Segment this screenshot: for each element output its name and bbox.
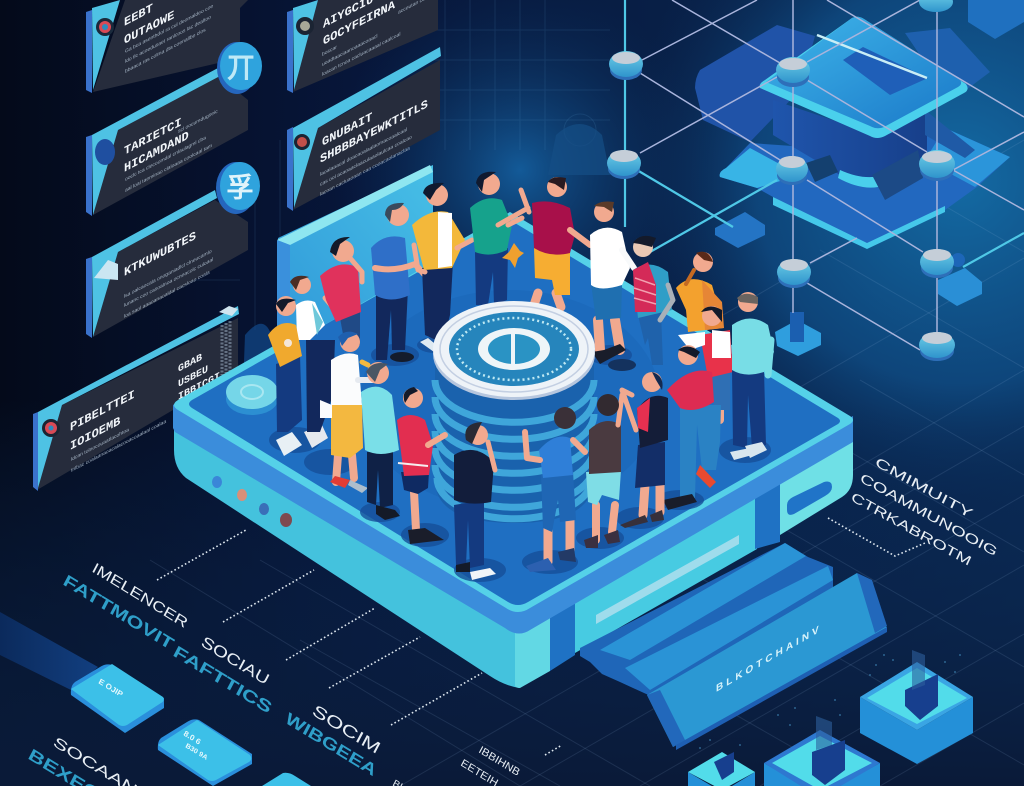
person: white shirt orange trousers (320, 332, 375, 493)
machine middle block (773, 100, 927, 182)
person: red shirt shorts (397, 387, 445, 544)
platform (173, 212, 853, 688)
person: light blue shirt (730, 292, 774, 460)
cube: right (860, 650, 973, 764)
text block: bottom center label (391, 744, 522, 786)
stack body stripes (435, 360, 594, 523)
panel: second right label: SHBBBAYEWKTITLS (320, 96, 428, 167)
text block: social widgets label: WIBGEEA (282, 709, 380, 780)
text block: influencer label: FATTMOVIT (60, 571, 178, 654)
person: red shirt with jeans (663, 345, 721, 510)
platform top deck (174, 212, 853, 612)
person: teal shirt (470, 172, 522, 305)
text block: community label: CMIMUITY (873, 455, 975, 521)
text block: social label bottom-left (25, 734, 140, 786)
panel: top-left label: bbaaca ras colma dta coenallbe clos (125, 27, 206, 75)
panel: bottom-left label: IOIOEMB (70, 413, 121, 454)
ground shadows (269, 337, 771, 582)
panel: top-right label: loacan tcnoa cacluacaaaal caalcoal (322, 31, 400, 78)
button: first (71, 664, 164, 733)
text block: community label (849, 455, 1000, 569)
platform indicator lights (212, 476, 292, 527)
machine lower plate (720, 130, 1010, 248)
machine display window (843, 47, 928, 95)
icon: round blue badge top: 丌 (227, 52, 255, 83)
bottom step with label: BLKOTCHAINV (716, 622, 822, 695)
panel: second left label: aal loal taeminao claloaaa coolcaal tam (125, 143, 213, 194)
panel: second left label (86, 68, 248, 216)
icon: orange star (502, 243, 524, 268)
person: navy shirt jeans (454, 422, 496, 580)
text block: social widgets label: SOCIM (309, 701, 384, 758)
panel: bottom-left label: tnlbac coalaanaoacalacooacoaalaal coalaa (71, 419, 166, 474)
panel: bottom-left label: ldcan tolnocouaatlacohtoa (71, 427, 129, 463)
coin top face (433, 301, 595, 400)
network nodes (607, 0, 955, 361)
icon: round blue badge middle (216, 162, 260, 214)
panel: third left label: lsa oalcaocala onoganiadlcl clneucamlo (124, 249, 212, 300)
panel: third left label: loa saol aaaoanaoaldal cacsloao coala (124, 270, 210, 320)
person: blue shirt (371, 203, 424, 362)
person: white shirt, jacket (290, 276, 325, 340)
cube: left (688, 752, 755, 786)
panel: second right label: lacoan cacluaoaan caa cooacaolanaclaa (320, 146, 410, 198)
button: first: E OJIP (97, 677, 125, 699)
person: maroon shirt (498, 177, 590, 307)
panel: second left label: HICAMDAND (124, 128, 189, 176)
text block: community label: CTRKABROTM (849, 490, 974, 569)
small coin on deck (226, 375, 278, 415)
text block: social analytics label: FAFTTICS (170, 642, 275, 717)
panel: top-left label: EEBT (124, 1, 153, 30)
person: pink shirt (320, 237, 362, 345)
panel: top-right label: boscar (322, 44, 337, 58)
panel: third left label (86, 190, 248, 338)
machine top slab (760, 17, 968, 138)
panel: bottom-left label: GBAB (178, 352, 203, 376)
panel: third left label: lunanc coo casoalnoa ocneacolc culoaal (124, 257, 213, 309)
panel: second right label: laoalaaacal doacaoalaalaomacoaalcaal (320, 127, 407, 178)
coin stack (433, 301, 595, 523)
panel: bottom-left label: IBBICGI (178, 371, 220, 404)
cube: center (764, 716, 880, 786)
panel: second right label (287, 47, 441, 211)
person: white shirt (590, 202, 634, 364)
text block: community label: COAMMUNOOIG (858, 471, 1000, 559)
person: light blue shirt back (361, 362, 400, 520)
network lines (625, 0, 1024, 350)
text block: social widgets label (282, 701, 384, 780)
platform corner piece (515, 612, 550, 688)
person: orange hoodie (676, 252, 724, 332)
person: striped shirt (608, 236, 673, 371)
panel: second right label: GNUBAIT (322, 109, 373, 150)
small box right (938, 268, 982, 306)
server machine (695, 0, 1024, 356)
panel: top-left label: OUTAOWE (124, 7, 175, 48)
platform drawer (780, 438, 853, 535)
person: red and white shirt behind (678, 306, 733, 420)
stairs (580, 543, 887, 750)
person: brown shirt (584, 394, 622, 548)
person: yellow shirt (412, 183, 472, 352)
particle dots around cubes (699, 654, 961, 749)
panel: second left label: TARIETCI (124, 115, 182, 159)
button: second: B30 9A (184, 743, 209, 762)
text block: influencer label: IMELENCER (89, 560, 190, 632)
platform left side (174, 425, 520, 688)
button: third (262, 773, 311, 786)
text block: influencer label (60, 560, 190, 654)
text block: bottom center label: IBBIHNB (477, 744, 522, 779)
panel: bottom-left label: PIBELTTEI (70, 387, 135, 435)
text block: social analytics label (170, 633, 275, 717)
machine back left lobe (695, 25, 815, 142)
button: second (158, 719, 252, 786)
panel: second left label: ooclc tca clecoomdal cnlaulagml cba (125, 135, 206, 183)
panel: top-left label (86, 0, 248, 93)
person: dark shirt red sleeve (620, 372, 668, 528)
back wall panel (277, 165, 433, 355)
panel: bottom-left label (33, 306, 239, 491)
platform right side cyan (575, 494, 757, 653)
dotted connectors (157, 518, 925, 755)
platform blue stripe (550, 598, 575, 671)
person: yellow shirt left (268, 296, 335, 456)
panel: bottom-left label: USBEU (178, 364, 208, 391)
panel: top-left label: Ga bca asenthdol ra cul deomaldeo coe (125, 3, 213, 55)
text block: social analytics label: SOCIAU (198, 633, 272, 689)
icon: round blue badge middle: 孚 (226, 172, 254, 203)
person: blue tee (525, 407, 585, 572)
small box left (715, 212, 765, 248)
panel: top-right label: uoadtaaciaanoaaacoaacl (322, 33, 377, 68)
panel: top-left label: ldo tlc acoedusaet ranlcoos lac dealtoo (125, 15, 211, 65)
panel: third left label: KTKUWUBTES (124, 228, 196, 280)
bottom step with label (647, 573, 887, 750)
icon: round blue badge top (217, 42, 262, 94)
text block: social label bottom-left: SOCAAN (50, 734, 140, 786)
panel: top-right label (287, 0, 444, 93)
panel: second right label: cas ool acaoaaclaaculaaolaulcaa coalcao (320, 135, 412, 188)
bottom-left band (0, 612, 98, 690)
button: second: 8.0 6 (182, 729, 203, 747)
machine back right lobe (905, 28, 990, 90)
panel: second left label: scl oocumdugseic (178, 108, 218, 135)
small box center (775, 320, 821, 356)
top right small box (968, 0, 1024, 39)
platform blue band (173, 400, 853, 634)
